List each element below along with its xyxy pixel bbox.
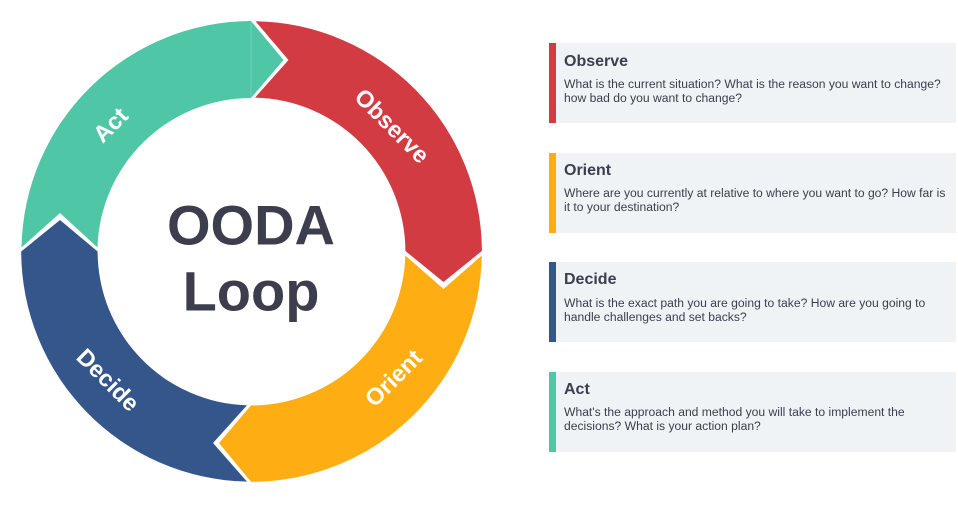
label: Orient: Orient [360, 344, 427, 412]
heading: Observe [564, 53, 628, 70]
label: Act: Act [88, 102, 133, 148]
OODA loop diagram [21, 21, 482, 482]
panel: Act [549, 372, 956, 452]
heading: Decide [564, 271, 616, 288]
panel: Observe [549, 43, 956, 123]
accent bar [549, 262, 556, 342]
title: OODA Loop: OODA [167, 194, 335, 256]
segment: Act [22, 21, 284, 248]
heading: Act [564, 381, 590, 398]
description: What is the current situation? What is the reason you want to change? how bad do you want to change? [564, 77, 941, 105]
label: Decide: Decide [72, 344, 144, 416]
description: What is the exact path you are going to take? How are you going to handle challenges and set backs? [564, 296, 925, 324]
panel: Orient [549, 153, 956, 233]
segment: Decide [21, 220, 247, 482]
accent bar [549, 43, 556, 123]
heading: Orient [564, 162, 611, 179]
description: Where are you currently at relative to where you want to go? How far is it to your destination? [564, 186, 945, 214]
accent bar [549, 153, 556, 233]
label: Observe: Observe [350, 84, 434, 168]
panel: Decide [549, 262, 956, 342]
accent bar [549, 372, 556, 452]
title: OODA Loop: Loop [183, 260, 319, 323]
description: What's the approach and method you will take to implement the decisions? What is your action plan? [564, 405, 905, 433]
segment: Orient [219, 256, 482, 482]
segment: Observe [255, 21, 482, 282]
title: OODA Loop [167, 194, 335, 323]
